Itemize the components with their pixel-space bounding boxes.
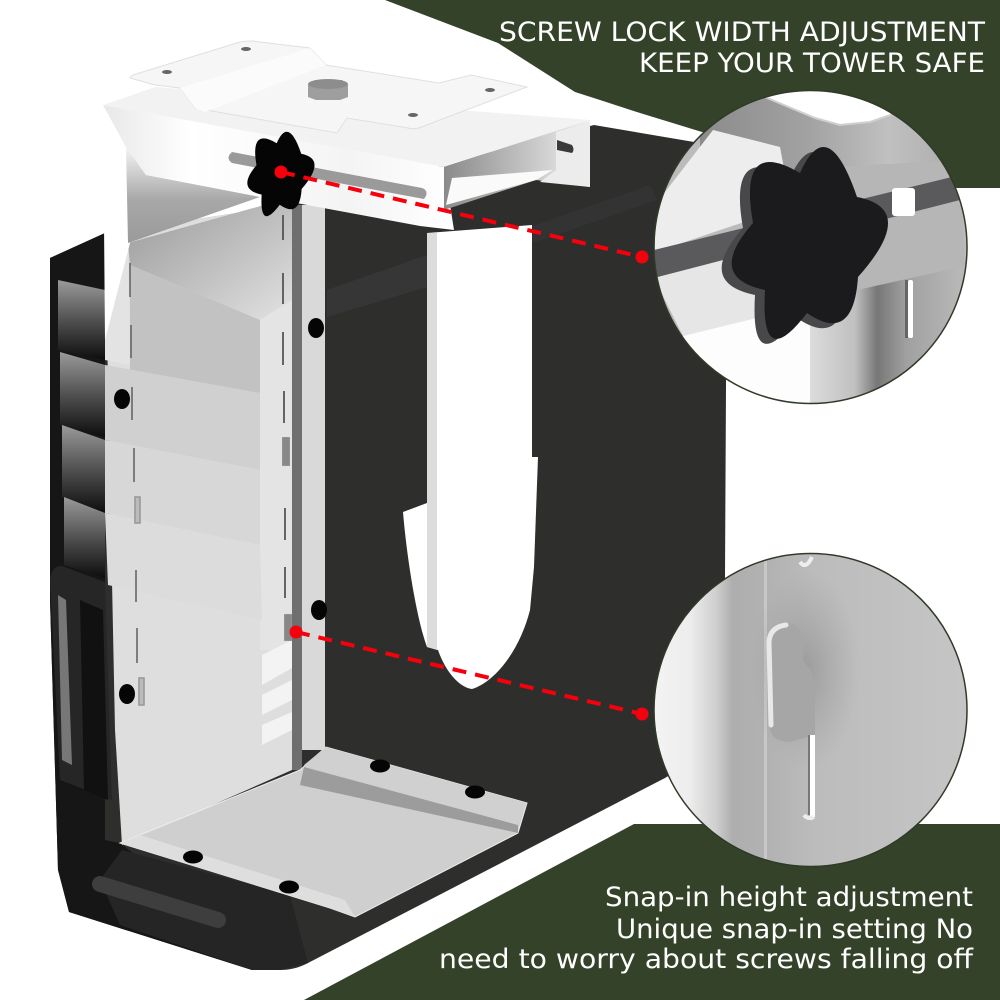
icon: star knob: [247, 132, 315, 216]
panel band 2: [105, 365, 260, 470]
arm light strip: [302, 205, 325, 750]
vertical arm: [292, 205, 302, 770]
rear lip: [304, 747, 527, 825]
panel band 1: [130, 265, 260, 393]
inner wedge: [126, 147, 260, 243]
caption: snap-in: Unique snap-in setting No: [616, 914, 973, 945]
front lip: [120, 835, 355, 917]
lower bezel: [50, 566, 112, 800]
lower bezel dark block: [80, 600, 108, 800]
base plate: [120, 747, 527, 917]
channel end wall: [540, 122, 590, 187]
drive bay rows: [58, 280, 105, 578]
right column slots: [283, 215, 291, 640]
front handle: [100, 884, 218, 920]
channel end slot: [557, 140, 574, 153]
adjustment slot: [228, 152, 426, 199]
plate left raised fold: [180, 48, 326, 112]
heading: screw lock: KEEP YOUR TOWER SAFE: [639, 48, 985, 79]
top lip shading right: [533, 185, 657, 243]
tower front: [50, 233, 280, 970]
dashed pointer: knob: [274, 166, 648, 264]
circle: knob detail: [650, 85, 980, 415]
bottom right green banner: [304, 824, 1000, 1000]
rear strap: [403, 225, 538, 689]
panel band 3: [105, 440, 260, 545]
caption: snap-in: Snap-in height adjustment: [605, 882, 973, 913]
bezel highlight: [58, 595, 72, 765]
left column slots: [130, 263, 144, 705]
tower side panel: [50, 125, 727, 970]
mounting plate: [130, 41, 527, 133]
top box left flank: [103, 100, 130, 340]
rubber feet and screws: [114, 318, 485, 894]
heading: screw lock: SCREW LOCK WIDTH ADJUSTMENT: [499, 17, 986, 48]
top surface: [103, 87, 590, 167]
heading: screw lock: [499, 17, 986, 79]
underside reflections: [100, 850, 308, 970]
PC tower: [50, 125, 727, 970]
bracket: [103, 41, 590, 917]
panel top shading: [128, 200, 292, 320]
hex bolt: [308, 79, 348, 100]
top right green banner: [385, 0, 1000, 188]
panel left margin: [105, 228, 130, 365]
dashed pointer: snap-in: [290, 626, 648, 720]
panel band 4: [105, 513, 262, 620]
translucent front panel: [105, 205, 292, 845]
circle: snap-in detail: [650, 550, 980, 880]
caption: snap-in: need to worry about screws falling off: [439, 944, 974, 975]
plate holes: [162, 47, 495, 117]
panel lower highlights: [262, 640, 292, 745]
channel floor: [446, 170, 553, 205]
strap edge: [427, 233, 437, 650]
top lip shading: [327, 255, 427, 317]
front face: [103, 105, 454, 230]
caption: snap-in: [439, 882, 974, 975]
plate groove: [300, 767, 518, 833]
channel opening: [444, 120, 590, 210]
panel right margin: [260, 300, 292, 650]
